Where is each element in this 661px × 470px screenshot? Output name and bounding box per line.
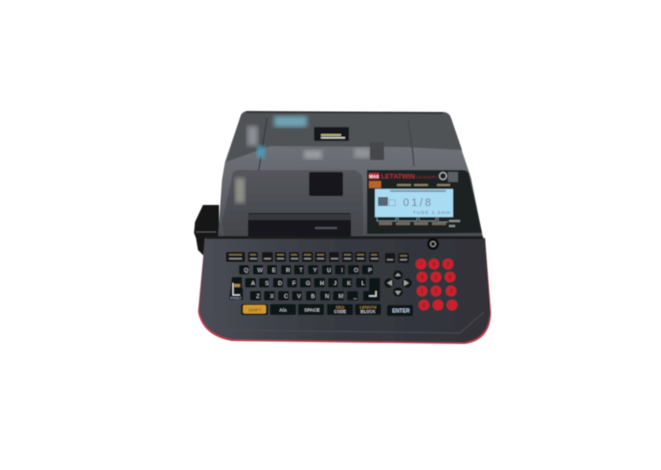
illustration: label printer: 5	[435, 275, 438, 281]
panel brand: LETATWIN	[381, 174, 415, 180]
letter keys: U	[327, 268, 331, 274]
transparent lid	[218, 111, 483, 238]
bottom function keys	[241, 304, 413, 316]
cover latch	[248, 213, 351, 237]
bottom function keys: BLOCK	[361, 309, 375, 314]
deck top edge	[206, 236, 483, 239]
bottom function keys: LENGTH	[360, 304, 376, 310]
letter keys: V	[297, 294, 301, 300]
letter keys: _	[352, 294, 357, 300]
panel brand	[369, 172, 458, 182]
lcd screen	[375, 189, 453, 217]
letter keys: S	[265, 281, 269, 287]
letter keys: Q	[244, 268, 249, 274]
letter keys: A	[251, 281, 255, 287]
panel brand: LM-550A2PC	[416, 174, 438, 180]
bottom function keys: A/a	[279, 308, 287, 312]
lid label	[314, 127, 349, 141]
letter keys: C	[284, 294, 288, 300]
letter keys: D	[278, 281, 282, 287]
letter keys: H	[320, 281, 324, 287]
letter keys: O	[354, 268, 359, 274]
printer side connector	[194, 205, 219, 256]
cover window	[309, 172, 343, 196]
letter keys: X	[270, 294, 274, 300]
illustration: label printer: 2	[435, 289, 438, 295]
letter keys: I	[341, 268, 343, 274]
letter keys: B	[311, 294, 315, 300]
letter keys: G	[306, 281, 310, 287]
letter keys: P	[368, 268, 372, 274]
illustration: label printer: 9	[447, 262, 450, 268]
letter keys: T	[299, 268, 303, 274]
illustration: label printer: 0	[423, 303, 426, 309]
illustration: label printer: 3	[450, 289, 453, 295]
lcd screen: TUBE 2.5mm	[413, 210, 450, 215]
letter keys: Z	[256, 294, 260, 300]
illustration: label printer: 4	[421, 275, 424, 281]
arrow keys	[384, 270, 412, 297]
letter keys: J	[334, 281, 337, 287]
letter keys: E	[272, 268, 276, 274]
letter keys: K	[347, 281, 351, 287]
letter keys: W	[257, 268, 263, 274]
letter keys: N	[325, 294, 329, 300]
bottom function keys: SEQ	[336, 304, 344, 310]
illustration: label printer: 8	[433, 262, 436, 268]
bottom function keys: CODE	[334, 309, 346, 314]
keyboard deck	[198, 238, 491, 344]
function key row	[226, 252, 409, 263]
letter keys: L	[361, 281, 365, 287]
bottom function keys: SPACE	[304, 308, 320, 312]
illustration: label printer: 7	[420, 262, 423, 268]
tape cassette cover	[222, 170, 363, 237]
left print key: PRINT	[230, 296, 242, 300]
power button	[427, 238, 439, 250]
numeric keypad	[416, 259, 457, 310]
lcd screen: □ 01/8	[389, 197, 431, 209]
letter keys: F	[292, 281, 296, 287]
letter keys: Y	[313, 268, 317, 274]
illustration: label printer: 1	[421, 289, 424, 295]
letter keys: M	[339, 294, 344, 300]
bottom function keys: SHIFT	[248, 308, 262, 312]
control panel	[367, 170, 482, 234]
letter keys	[239, 265, 373, 300]
bottom function keys: ENTER	[392, 308, 410, 314]
left print key	[229, 277, 243, 300]
illustration: label printer: 6	[449, 275, 452, 281]
letter keys: R	[286, 268, 290, 274]
return key	[363, 278, 380, 301]
panel brand: MAX	[369, 174, 379, 179]
